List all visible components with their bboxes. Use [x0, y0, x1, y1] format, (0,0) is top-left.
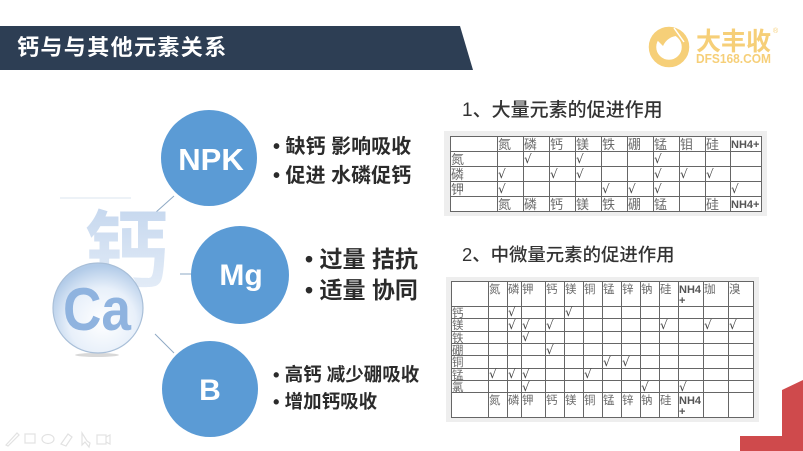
table: medium and trace element promotion: 镁 — [565, 282, 577, 296]
table: macro element promotion: √ — [524, 152, 532, 166]
table: macro element promotion: 钙 — [550, 197, 563, 212]
table: medium and trace element promotion: √ — [660, 318, 668, 332]
table: macro element promotion: 钙 — [550, 137, 563, 152]
decorative connector lines — [155, 196, 192, 353]
corner accent: red shape — [740, 380, 803, 451]
table: medium and trace element promotion: 锌 — [622, 393, 634, 407]
table: medium and trace element promotion: 锰 — [603, 393, 615, 407]
table: macro element promotion: 硅 — [706, 197, 719, 212]
table: medium and trace element promotion: 钙 — [546, 393, 558, 407]
heading: macro elements: 1、大量元素的促进作用 — [462, 99, 663, 121]
table: medium and trace element promotion: √ — [565, 305, 573, 319]
table: macro element promotion: NH4+ — [731, 199, 759, 211]
table: macro element promotion: 铁 — [602, 197, 615, 212]
table: macro element promotion: √ — [706, 167, 714, 181]
table: medium and trace element promotion: 溴 — [729, 282, 741, 296]
table: medium and trace element promotion: 钠 — [641, 393, 652, 407]
text block: B effects: • 增加钙吸收 — [273, 391, 378, 412]
watermark: 钙 character: 钙 — [84, 204, 168, 298]
table: medium and trace element promotion: √ — [584, 367, 592, 381]
table: medium and trace element promotion: 镁 — [452, 318, 464, 332]
table: medium and trace element promotion: 铜 — [584, 282, 596, 296]
table: macro element promotion: 钾 — [451, 182, 464, 197]
table: medium and trace element promotion: √ — [522, 318, 530, 332]
table: macro element promotion: 硼 — [628, 137, 641, 152]
table: macro element promotion: √ — [680, 167, 688, 181]
table: medium and trace element promotion: √ — [546, 318, 554, 332]
table: medium and trace element promotion: √ — [522, 330, 530, 344]
text block: Mg effects: • 适量 协同 — [305, 277, 418, 303]
table: macro element promotion: √ — [498, 167, 506, 181]
table: medium and trace element promotion: 氮 — [489, 282, 501, 296]
table: macro element promotion: 铁 — [602, 137, 615, 152]
table: medium and trace element promotion: 钙 — [452, 306, 464, 320]
table: macro element promotion: 磷 — [524, 197, 537, 212]
table: macro element promotion: 锰 — [654, 197, 667, 212]
table: medium and trace element promotion: 硅 — [660, 394, 672, 407]
heading: trace elements: 2、中微量元素的促进作用 — [462, 244, 675, 265]
table: macro element promotion — [444, 131, 767, 216]
table: medium and trace element promotion: 钙 — [546, 282, 558, 296]
table: macro element promotion: 硅 — [706, 137, 719, 152]
table: medium and trace element promotion: 氮 — [489, 393, 501, 407]
table: macro element promotion: √ — [576, 152, 584, 166]
table: macro element promotion: √ — [602, 182, 610, 196]
table: macro element promotion: 硼 — [628, 197, 641, 212]
table: macro element promotion: NH4+ — [731, 139, 759, 151]
icon: Ca sphere — [53, 263, 143, 357]
table: medium and trace element promotion: √ — [508, 367, 516, 381]
circle: Mg — [191, 226, 289, 324]
table: macro element promotion: 镁 — [576, 137, 589, 152]
table: macro element promotion: √ — [654, 182, 662, 196]
table: medium and trace element promotion: 铜 — [452, 355, 464, 369]
table: medium and trace element promotion: + — [679, 295, 685, 307]
table: macro element promotion: 氮 — [498, 197, 511, 212]
table: medium and trace element promotion: 锰 — [452, 368, 464, 382]
title banner — [0, 26, 473, 70]
table: macro element promotion: 磷 — [451, 167, 464, 182]
table: macro element promotion: √ — [654, 167, 662, 181]
table: medium and trace element promotion: 铁 — [452, 332, 464, 345]
table: medium and trace element promotion — [446, 277, 759, 422]
table: macro element promotion: 锰 — [654, 137, 667, 152]
logo: 大丰收 — [652, 27, 779, 66]
table: macro element promotion: 磷 — [524, 137, 537, 152]
table: medium and trace element promotion: 铜 — [584, 393, 596, 407]
table: medium and trace element promotion: NH4 — [679, 395, 702, 407]
logo: 大丰收: DFS168.COM — [696, 52, 771, 66]
circle: Mg: Mg — [219, 259, 263, 292]
table: macro element promotion: 钼 — [680, 137, 693, 152]
table: medium and trace element promotion: √ — [508, 305, 516, 319]
text block: B effects: • 高钙 减少硼吸收 — [273, 364, 420, 385]
table: medium and trace element promotion: √ — [546, 343, 554, 357]
table: medium and trace element promotion: NH4 — [679, 284, 702, 296]
text block: NPK effects — [273, 135, 411, 187]
table: medium and trace element promotion: 钾 — [522, 282, 534, 296]
table: medium and trace element promotion: 镁 — [565, 393, 577, 407]
table: medium and trace element promotion: 钠 — [641, 282, 652, 296]
text block: NPK effects: • 缺钙 影响吸收 — [273, 135, 411, 158]
text block: Mg effects: • 过量 拮抗 — [305, 246, 418, 272]
table: medium and trace element promotion: + — [679, 406, 685, 418]
table: medium and trace element promotion: 磷 — [508, 283, 520, 296]
table: medium and trace element promotion: √ — [603, 355, 611, 369]
logo: 大丰收: 大丰收 — [696, 28, 771, 56]
table: medium and trace element promotion: √ — [641, 380, 649, 394]
table: medium and trace element promotion: 硅 — [660, 283, 672, 296]
table: macro element promotion: √ — [731, 182, 739, 196]
table: medium and trace element promotion: √ — [729, 318, 737, 332]
table: macro element promotion: 氮 — [451, 152, 464, 167]
text block: B effects — [273, 364, 420, 412]
table: medium and trace element promotion: √ — [522, 367, 530, 381]
table: medium and trace element promotion: √ — [622, 355, 630, 369]
text block: NPK effects: • 促进 水磷促钙 — [273, 164, 411, 187]
table: medium and trace element promotion: √ — [679, 380, 687, 394]
table: macro element promotion: √ — [654, 152, 662, 166]
table: macro element promotion: 镁 — [576, 197, 589, 212]
circle: B: B — [199, 374, 221, 407]
text block: Mg effects — [305, 246, 418, 303]
table: medium and trace element promotion: √ — [704, 318, 712, 332]
table: medium and trace element promotion: 锰 — [603, 282, 615, 296]
table: macro element promotion: √ — [628, 182, 636, 196]
table: medium and trace element promotion: √ — [489, 367, 497, 381]
table: macro element promotion: √ — [498, 182, 506, 196]
toolbar icons — [6, 433, 110, 447]
circle: B — [162, 341, 258, 437]
table: macro element promotion: √ — [576, 167, 584, 181]
table: medium and trace element promotion: 硼 — [452, 344, 464, 357]
table: medium and trace element promotion: 珈 — [704, 282, 716, 296]
table: medium and trace element promotion: √ — [522, 380, 530, 394]
table: macro element promotion: √ — [550, 167, 558, 181]
logo: 大丰收: ® — [773, 27, 779, 35]
table: medium and trace element promotion: 磷 — [508, 394, 520, 407]
circle: NPK: NPK — [178, 142, 244, 177]
circle: NPK — [161, 110, 257, 206]
table: medium and trace element promotion: 氯 — [452, 380, 464, 394]
table: medium and trace element promotion: 钾 — [522, 393, 534, 407]
table: medium and trace element promotion: √ — [508, 318, 516, 332]
table: medium and trace element promotion: 锌 — [622, 282, 634, 296]
icon: Ca sphere: Ca — [63, 276, 132, 343]
table: macro element promotion: 氮 — [498, 137, 511, 152]
title banner: 钙与与其他元素关系 — [17, 35, 228, 60]
